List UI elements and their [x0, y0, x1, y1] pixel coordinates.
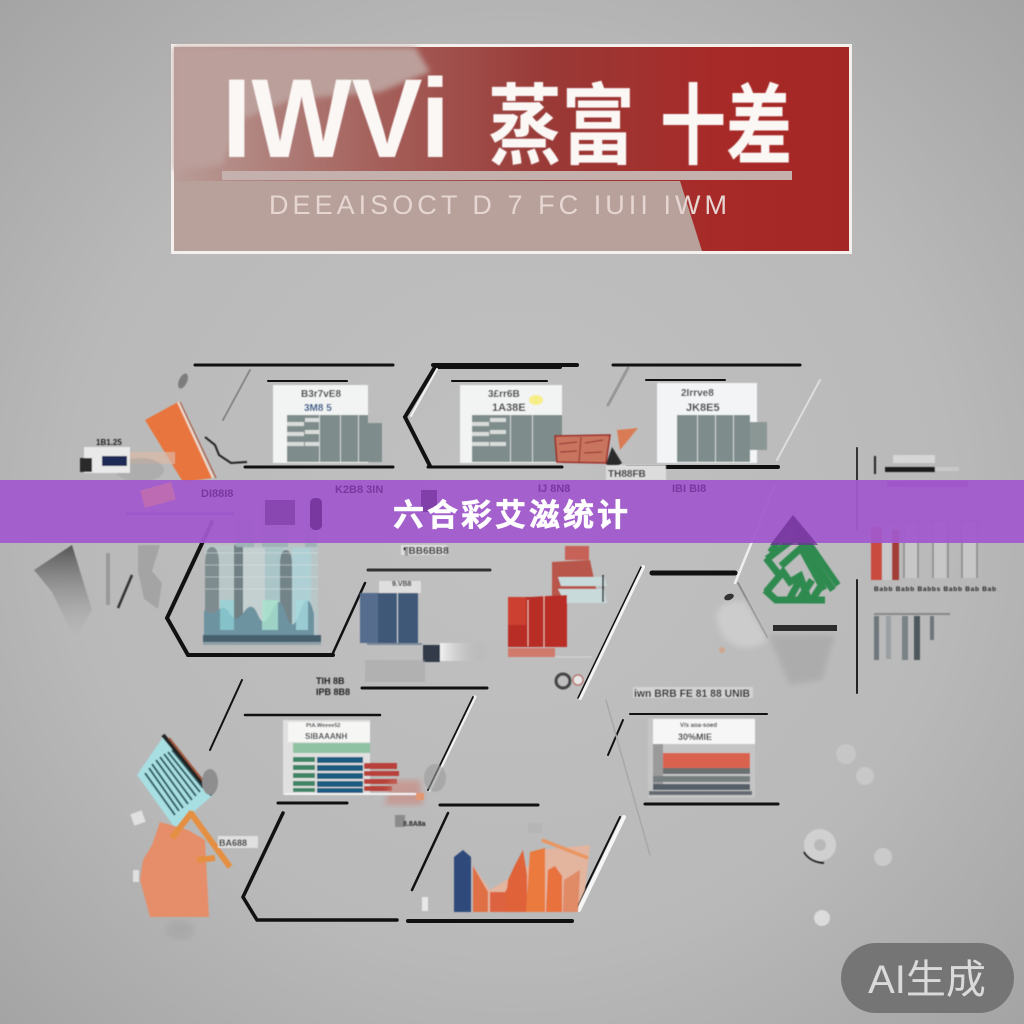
- chart: red gray table card: 30%MIE: [678, 732, 712, 742]
- chart: green blue red horizontal bars: PtA.Weeee52: [306, 723, 340, 729]
- chart: top card two: 1A38E: [492, 402, 526, 414]
- icon: red document: [555, 428, 638, 470]
- title: band text: 六合彩艾滋统计: [393, 498, 631, 533]
- text: small label beside orange blob: [218, 836, 258, 848]
- text: small left label: [80, 438, 130, 473]
- chart: top card three: 2Irrve8: [681, 388, 714, 399]
- text: small label below bars: [395, 815, 426, 828]
- text: printed label cluster top middle: [606, 465, 666, 480]
- chart: top card three: [657, 383, 767, 463]
- chart: right side bars: [871, 455, 996, 593]
- chart: top card one: 3M8 5: [304, 403, 332, 414]
- icon: green chevron house: [765, 520, 838, 600]
- text: ghost labels inside band: IJ 8N8: [538, 483, 570, 495]
- text: small label below bars: 8.8A8a: [403, 821, 426, 828]
- icon: gray shadow shapes: [716, 592, 835, 685]
- chart: top card three: JK8E5: [686, 402, 720, 414]
- heading: banner title: 蒸富: [488, 77, 635, 176]
- heading: banner title: 十差: [660, 77, 792, 176]
- icon: cyan striped document: [137, 735, 218, 828]
- badge: AI generated: [841, 943, 1014, 1013]
- text: ghost labels inside band: IBI BI8: [672, 483, 706, 495]
- text: small label beside orange blob: BA688: [219, 838, 247, 848]
- text: printed label cluster top middle: TH88FB: [608, 469, 646, 480]
- chart: blue panel: [360, 581, 490, 682]
- chart: right side gray bars: [874, 614, 950, 660]
- icon: orange blob and chevron: [130, 810, 230, 940]
- text: right bar labels: Babb Babb Babbs Babb Bab Bab: [874, 586, 996, 593]
- text: ghost labels inside band: K2B8 3IN: [335, 484, 383, 496]
- icon: gray fragments far left: [34, 512, 234, 640]
- panel: header banner: [172, 46, 850, 252]
- chart: top card one: [273, 385, 384, 463]
- chart: green blue red horizontal bars: [283, 720, 446, 805]
- text: small label under blue panel: [316, 676, 350, 697]
- chart: green blue red horizontal bars: SIBAAANH: [305, 732, 347, 741]
- icon: orange slab: [116, 372, 247, 482]
- heading: banner title: IWVi: [222, 56, 450, 181]
- text: small left label: 1B1.25: [96, 438, 122, 447]
- text: small label mid right: iwn BRB FE 81 88 UNIB: [634, 688, 750, 700]
- text: small label under blue panel: TIH 8B: [316, 676, 345, 686]
- text: small label under blue panel: IPB 8B8: [316, 687, 350, 697]
- chart: red gray table card: V/s aoa-soed: [680, 723, 717, 729]
- chart: top card two: 3£rr6B: [488, 389, 520, 400]
- text: ghost labels inside band: [140, 482, 818, 545]
- text: small label above blue panel: ¶BB6BB8: [403, 546, 449, 557]
- banner: purple title band: [0, 480, 1024, 545]
- badge: AI generated: AI生成: [868, 958, 986, 1002]
- icon: pale bubbles: [804, 744, 892, 926]
- chart: tall building bars: [203, 495, 321, 645]
- chart: red gray table card: [648, 718, 755, 798]
- heading: banner title: [222, 56, 792, 181]
- chart: red stacked panel: [508, 546, 607, 688]
- panel: hexagon frame lines: [167, 365, 857, 921]
- text: ghost labels inside band: DI88I8: [201, 488, 233, 500]
- chart: blue panel: 9.VB8: [392, 581, 412, 588]
- chart: top card one: B3r7vE8: [301, 389, 341, 400]
- text: banner subtitle: DEEAISOCT D 7 FC IUII IWM: [269, 190, 727, 220]
- chart: orange area bars with navy column: [422, 823, 590, 912]
- chart: top card two: [460, 385, 562, 463]
